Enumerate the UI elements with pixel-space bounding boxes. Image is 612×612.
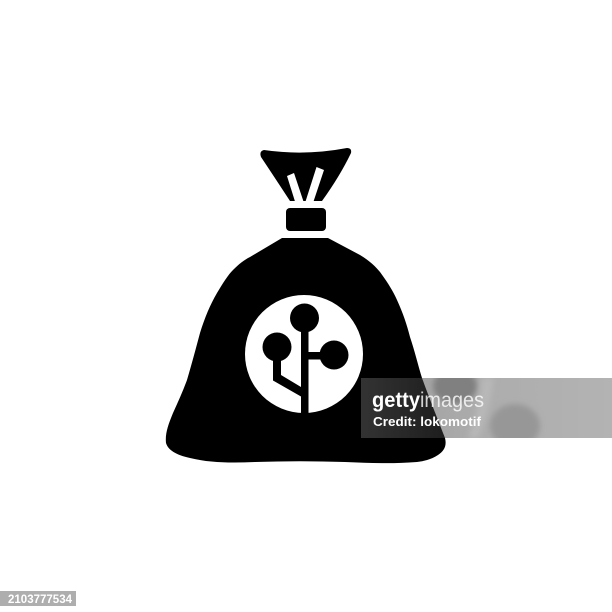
- bag body: [166, 238, 446, 463]
- watermark banner: [361, 378, 612, 438]
- bag neck funnel: [260, 148, 351, 202]
- banner background: [361, 378, 612, 438]
- tree symbol: [262, 304, 348, 414]
- watermark logo text: getty: [372, 388, 420, 412]
- image id number: 2103777534: [8, 594, 73, 606]
- icon: tied bag with tree: [166, 148, 446, 463]
- watermark credit: Credit: lokomotif: [373, 415, 482, 429]
- white circle badge: [245, 295, 363, 413]
- watermark logo text light: images: [420, 388, 484, 412]
- bag knot: [286, 208, 326, 231]
- image id tag: [0, 591, 76, 606]
